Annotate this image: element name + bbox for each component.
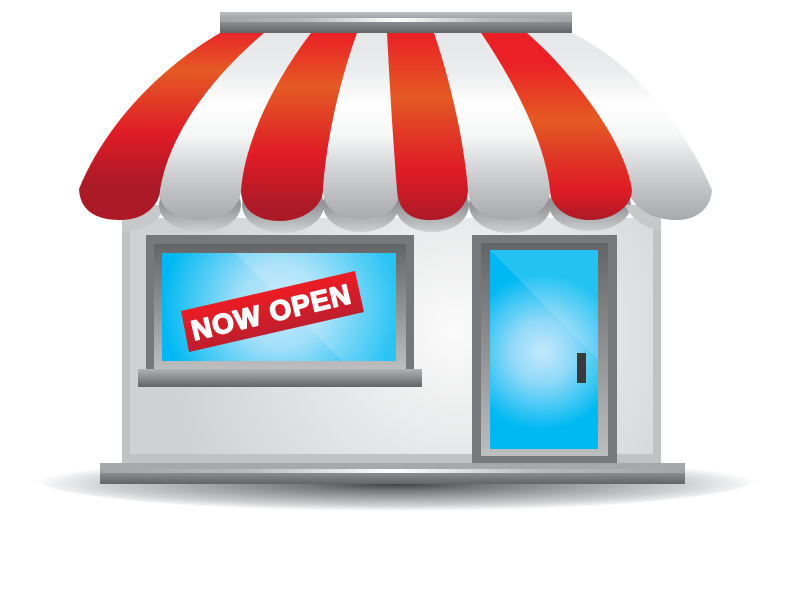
window	[138, 235, 422, 387]
awning rail	[220, 12, 572, 33]
door frame	[472, 235, 617, 463]
window frame	[146, 235, 414, 370]
ground shadow	[36, 445, 756, 511]
window glass	[162, 253, 396, 361]
door	[472, 235, 617, 463]
striped awning	[79, 33, 712, 221]
building wall	[122, 218, 661, 464]
base plinth	[100, 463, 685, 484]
white stripes	[159, 33, 712, 220]
door glass	[490, 250, 598, 449]
door handle	[577, 353, 586, 383]
now open banner: NOW OPEN	[188, 278, 354, 346]
window sill	[138, 369, 422, 387]
awning shadow scallops	[122, 177, 661, 233]
red stripes	[79, 33, 264, 220]
